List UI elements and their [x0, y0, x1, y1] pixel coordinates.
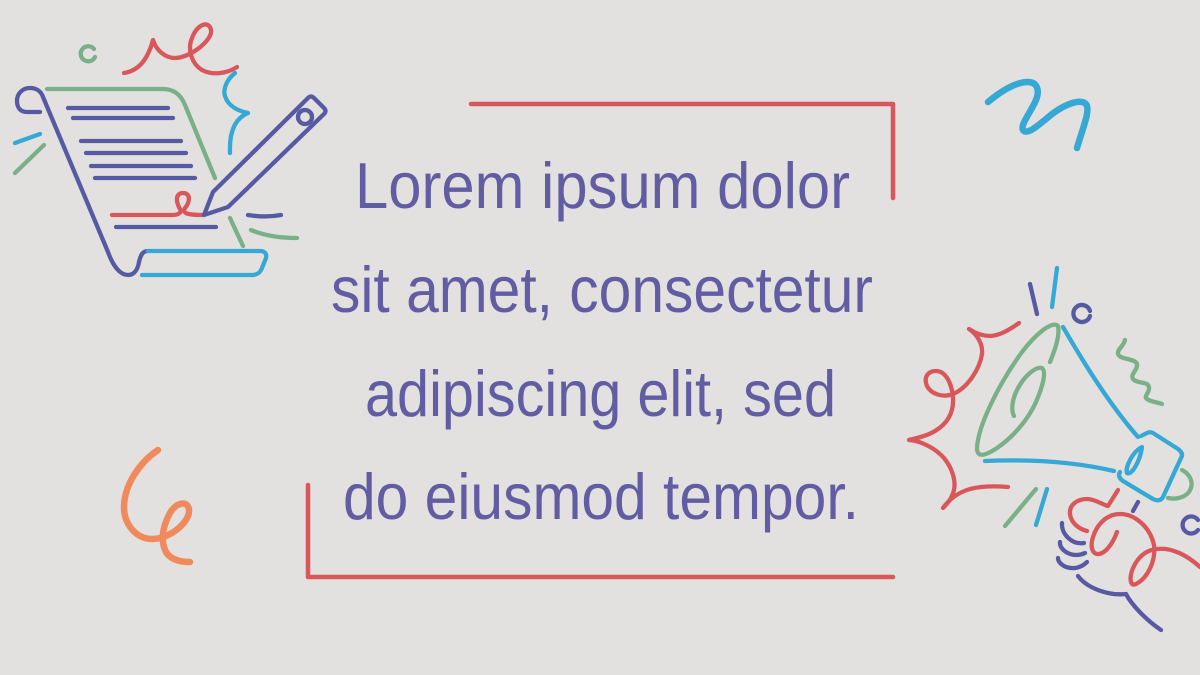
text lines [68, 108, 216, 227]
arm outline [1078, 576, 1161, 630]
sound burst [909, 323, 1019, 508]
main text block: adipiscing elit, sed [365, 357, 836, 430]
megaphone grip box [1119, 432, 1182, 500]
swirl accent [124, 24, 237, 73]
frame bracket: top right [471, 104, 893, 198]
icon: blue squiggle [988, 82, 1087, 148]
hand thumb [1070, 490, 1118, 531]
icon: megaphone held in hand [909, 268, 1200, 630]
main text block: do eiusmod tempor. [343, 460, 859, 533]
pencil [204, 96, 326, 215]
megaphone bell rim [977, 325, 1058, 455]
finger lines [1058, 523, 1087, 568]
small ring [81, 46, 95, 61]
spark dashes [15, 134, 40, 143]
icon: orange curl [124, 450, 190, 562]
green zigzag [1118, 340, 1162, 404]
main text block: sit amet, consectetur [331, 253, 873, 326]
hand fingers and wrist swirl [1092, 514, 1200, 585]
megaphone cone lower edge [985, 460, 1114, 471]
signature [112, 193, 204, 215]
main text block [331, 149, 873, 533]
icon: document scroll with pencil [15, 24, 326, 275]
megaphone cone upper edge [1063, 327, 1138, 437]
rings [1073, 305, 1090, 322]
scroll page outline [17, 88, 148, 275]
megaphone handle [1168, 470, 1192, 499]
grip inner ellipse [1127, 447, 1142, 473]
burst accent [224, 73, 248, 153]
page top and right edge [47, 89, 215, 178]
signal dashes [1036, 268, 1057, 525]
frame bracket: bottom left [308, 485, 893, 577]
main text block: Lorem ipsum dolor [355, 149, 850, 222]
pencil band [298, 110, 312, 124]
scroll bottom roll [142, 251, 266, 275]
